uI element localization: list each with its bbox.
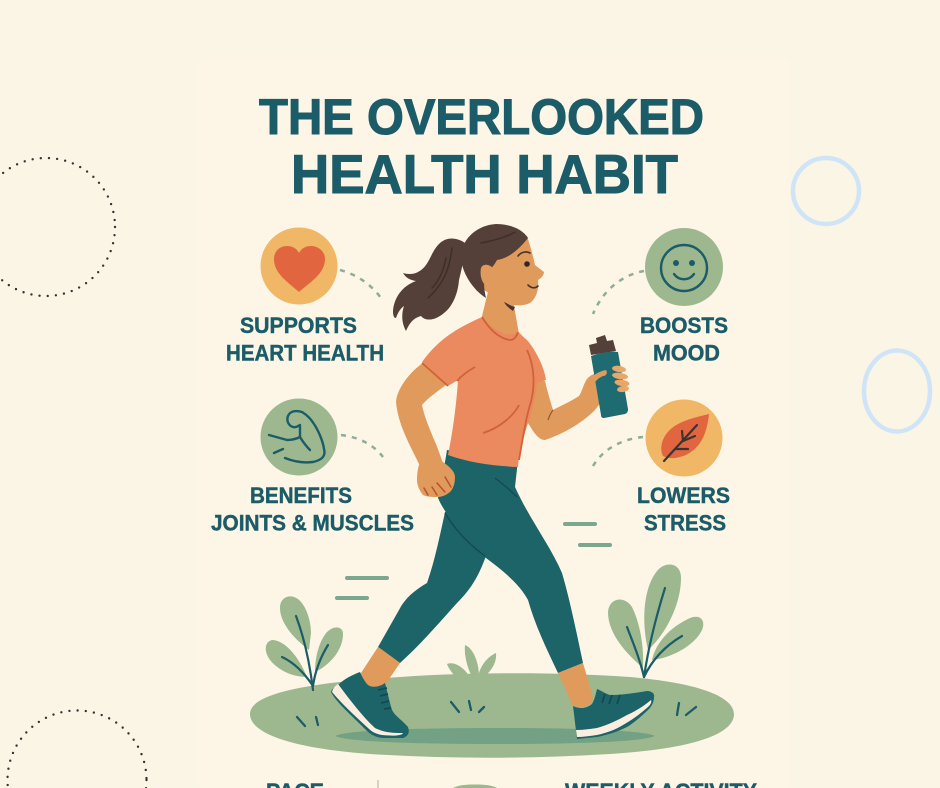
leg seams: [445, 478, 517, 556]
label: supports heart health: [226, 313, 384, 366]
hand: [417, 459, 455, 497]
face: [469, 236, 544, 305]
label: benefits joints and muscles: JOINTS & MUSCLES: [211, 510, 414, 536]
back leg: [378, 510, 486, 663]
back shoe: [331, 672, 409, 738]
decorative dotted circle bottom left: [8, 710, 146, 788]
fingers: [612, 365, 630, 393]
connector: muscle: [341, 435, 383, 457]
panel: poster background: [196, 60, 790, 788]
decorative blue oval ring: [864, 350, 930, 432]
connector: smiley: [593, 271, 644, 314]
title: THE OVERLOOKED: [259, 89, 704, 145]
hair: [461, 224, 528, 298]
grass tufts: [297, 701, 696, 726]
connector: heart: [340, 270, 381, 298]
water bottle: [589, 335, 628, 418]
label: benefits joints and muscles: BENEFITS: [250, 483, 352, 508]
front ankle: [558, 663, 593, 707]
label: boosts mood: [640, 313, 728, 366]
label: supports heart health: HEART HEALTH: [226, 340, 384, 366]
label: lowers stress: [637, 483, 730, 536]
label: lowers stress: STRESS: [644, 510, 726, 536]
front leg: [438, 450, 583, 673]
ear: [481, 265, 495, 287]
shirt: [422, 317, 546, 467]
title: HEALTH HABIT: [291, 143, 678, 205]
plant: left: [266, 596, 343, 690]
icon: heart: [260, 228, 338, 304]
decorative dotted circle top left: [0, 158, 115, 296]
bottom section: divider: [377, 780, 379, 788]
plant: small centre tuft: [447, 645, 496, 677]
ground shadow: [335, 728, 655, 744]
chin shadow: [503, 300, 515, 311]
back ankle: [361, 647, 400, 687]
label: boosts mood: MOOD: [653, 340, 720, 366]
connector: leaf: [593, 437, 643, 466]
eye and mouth: [524, 261, 530, 267]
label: benefits joints and muscles: [211, 483, 414, 536]
front shoe: [573, 689, 654, 739]
arm crease: [548, 410, 553, 420]
neck: [481, 292, 519, 337]
icon: smiley: [645, 228, 723, 306]
label: supports heart health: SUPPORTS: [240, 313, 357, 338]
speed lines: [337, 524, 610, 598]
thumb: [587, 370, 607, 388]
bottom section: circle icon: [453, 784, 497, 788]
figure: walking woman: [331, 224, 654, 739]
back arm: [396, 362, 446, 466]
plant: right: [608, 565, 703, 677]
icon: muscle: [260, 398, 338, 476]
shirt details: [422, 317, 534, 460]
hair strands: [481, 232, 515, 243]
front arm: [528, 370, 608, 440]
ponytail: [393, 238, 465, 331]
ponytail strands: [428, 248, 452, 298]
ground: [250, 673, 734, 758]
title: [259, 89, 704, 205]
icon: leaf: [646, 400, 722, 476]
label: boosts mood: BOOSTS: [640, 313, 728, 338]
label: lowers stress: LOWERS: [637, 483, 730, 508]
decorative blue ring: [793, 158, 859, 224]
